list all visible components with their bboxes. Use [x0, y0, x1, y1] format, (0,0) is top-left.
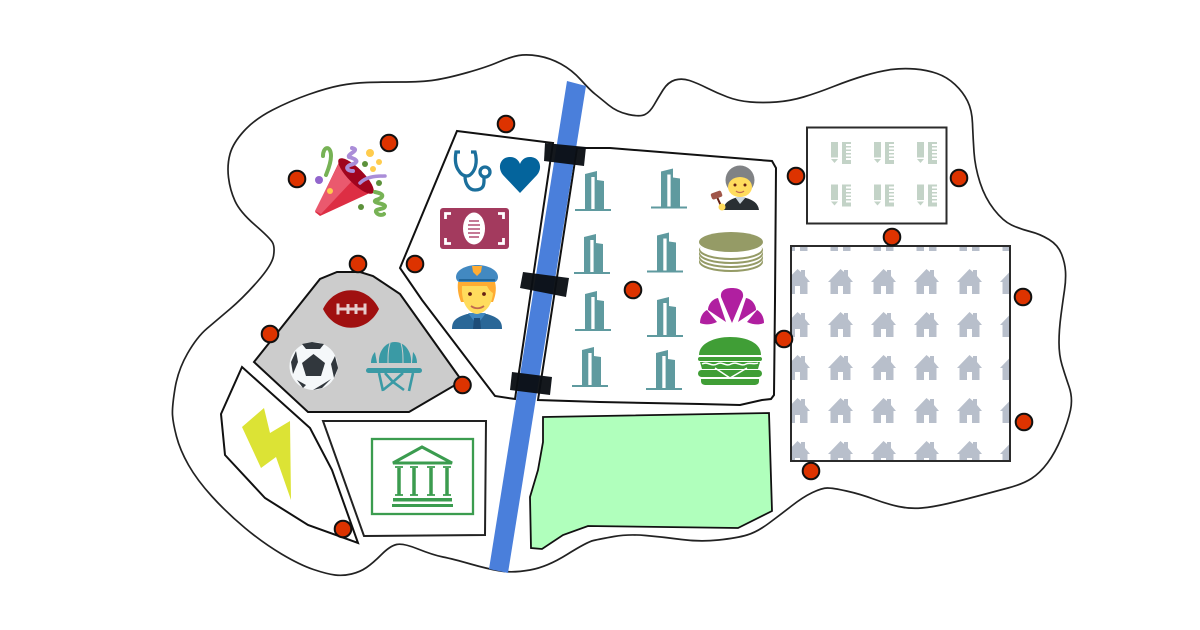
icon: tower 8: [646, 350, 682, 390]
icon: burger: [698, 337, 762, 385]
panel: housing zone: [791, 246, 1010, 461]
panel: towers block right of river: [538, 148, 776, 405]
icon: banknote: [440, 208, 509, 249]
icon: government building: [372, 439, 473, 514]
icon: police officer: [452, 265, 502, 329]
icon: tower 2: [651, 168, 687, 208]
map boundary outline: [172, 55, 1071, 575]
pencil and ruler pattern: [831, 142, 938, 208]
panel: civic block left of river: [400, 131, 553, 399]
icon: basketball hoop: [366, 342, 422, 391]
bridge 3: [510, 372, 552, 395]
icon: stethoscope: [455, 152, 490, 190]
panel: sports area: [254, 272, 462, 412]
bridge 1: [544, 143, 586, 166]
markers: red location dots: [262, 116, 1032, 537]
panel: government building area: [323, 421, 486, 536]
panel: power area: [221, 367, 358, 543]
panel: pencil and ruler zone: [807, 128, 946, 224]
panel: green park: [530, 413, 772, 549]
icon: party popper: [315, 148, 385, 216]
icon: soccer ball: [290, 342, 338, 390]
icon: magenta fan: [700, 288, 764, 324]
icon: heart: [500, 157, 540, 193]
icon: tower 5: [575, 291, 611, 331]
icon: coin stack: [699, 232, 763, 272]
icon: tower 1: [575, 171, 611, 211]
icon: lightning bolt: [242, 408, 291, 500]
icon: tower 6: [647, 297, 683, 337]
river: [489, 81, 586, 573]
icon: tower 4: [647, 232, 683, 272]
icon: football: [323, 290, 379, 328]
icon: tower 7: [572, 347, 608, 387]
icon: judge: [710, 166, 759, 210]
icon: tower 3: [574, 234, 610, 274]
bridge 2: [520, 272, 569, 297]
